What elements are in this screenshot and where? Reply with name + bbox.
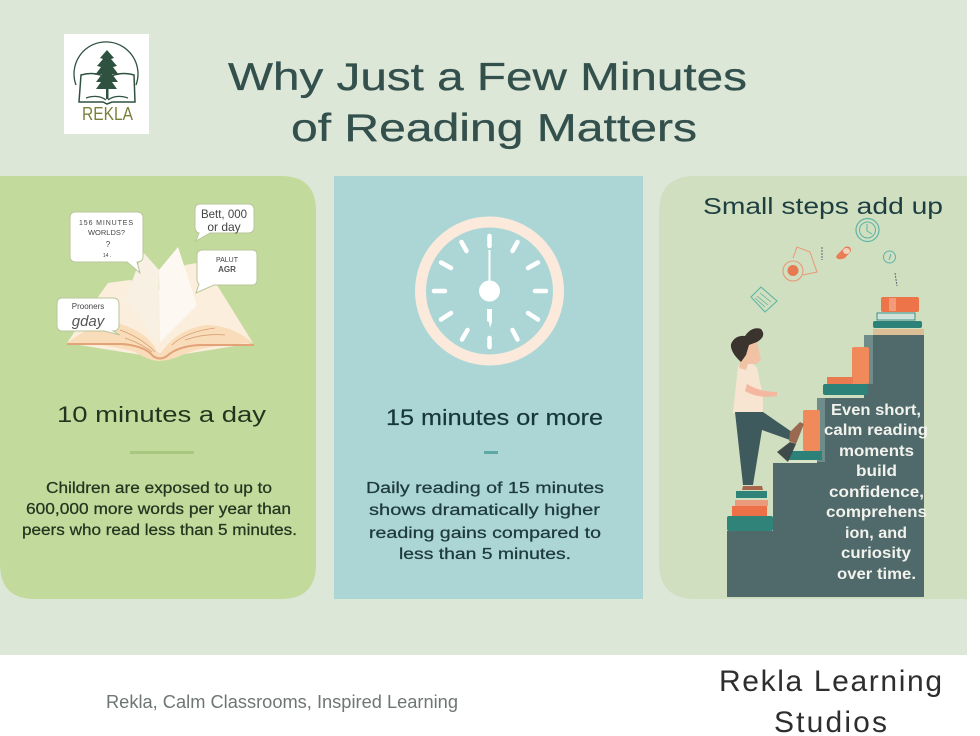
panel text: shows dramatically higher [369,502,600,519]
speech bubble: Prooners gday [57,298,120,335]
panel text: 600,000 more words per year than [26,501,291,518]
speech bubble: Prooners gday: gday [72,313,106,330]
title: of Reading Matters [291,107,697,150]
panel heading: 10 minutes a day [57,402,266,427]
panel text [366,480,604,563]
logo: Rekla tree and book [64,34,149,134]
panel text over stairs: curiosity [841,545,911,562]
panel: 15 minutes or more [334,176,643,599]
speech bubble: Bett, 000: Bett, 000 [201,209,247,221]
panel text over stairs: moments [839,443,914,460]
title [228,56,747,150]
panel: 10 minutes a day [0,176,316,599]
floating icons [751,218,897,312]
panel text over stairs: comprehens [826,504,927,521]
icon: clock outline [856,218,879,242]
book stacks on stairs [727,297,924,531]
panel heading: Small steps add up [703,193,943,219]
speech bubble: Palut Agr: AGR [218,265,236,274]
footer tagline: Rekla, Calm Classrooms, Inspired Learning [106,692,458,712]
panel text: reading gains compared to [369,525,601,542]
speech bubble: Prooners gday: Prooners [72,302,104,311]
panel text over stairs: confidence, [829,484,924,501]
panel heading: 15 minutes or more [386,405,603,430]
speech bubble: 156 minutes [70,212,143,273]
logo: Rekla tree and book: REKLA [82,104,133,124]
panel text over stairs: Even short, [831,402,921,419]
speech bubble: 156 minutes: 14 . [103,253,111,259]
speech bubble: 156 minutes: 156 MINUTES [79,220,133,227]
speech bubble: 156 minutes: WORLDS? [88,228,125,237]
icon: orange pill [836,246,851,259]
speech bubble: Bett, 000 [195,204,254,241]
footer brand: Rekla Learning [719,665,942,698]
panel text: Daily reading of 15 minutes [366,480,604,497]
speech bubble: Bett, 000: or day [207,220,241,234]
illustration: dark staircase [727,335,924,597]
speech bubble: Palut Agr [196,250,257,293]
figure: child climbing [731,328,804,490]
illustration: open book with speech bubbles [57,204,257,361]
panel text [22,480,297,539]
panel text: Children are exposed to up to [46,480,272,497]
panel text over stairs: calm reading [824,422,928,439]
panel text over stairs: build [856,463,897,480]
icon: orange badge [783,247,817,281]
icon: document card [751,287,777,312]
title: Why Just a Few Minutes [228,56,747,99]
icon: small clock [884,251,896,263]
speech bubble: 156 minutes: ? [106,240,111,249]
panel text over stairs [824,402,928,583]
footer [106,665,942,736]
speech bubble: Palut Agr: PALUT [216,257,239,264]
panel text over stairs: ion, and [845,525,907,542]
footer brand [719,665,942,736]
panel text: peers who read less than 5 minutes. [22,522,297,539]
panel: small steps add up [659,176,967,599]
icon: clock [420,222,558,360]
panel text: less than 5 minutes. [399,546,571,563]
panel text over stairs: over time. [837,566,916,583]
